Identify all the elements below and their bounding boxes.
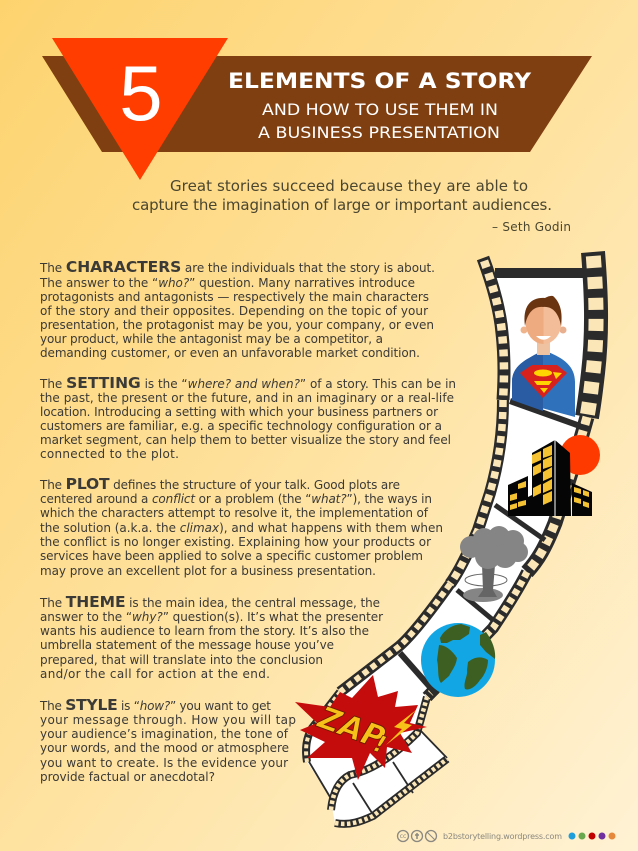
text block: plot: The PLOT defines the structure of your talk. Good plots are (39, 475, 400, 493)
subtitle line 2: A BUSINESS PRESENTATION (258, 123, 500, 142)
text block: characters: of the story and their opposites. Depending on the topic of your (40, 304, 428, 318)
text block: plot: may prove an excellent plot for a business presentation. (40, 564, 376, 578)
film frames: white interior (306, 272, 596, 797)
text block: setting: customers are familiar, e.g. a specific technology configuration or a (40, 419, 442, 433)
text block: setting: market segment, can help them to better visualize the story and feel (40, 433, 451, 447)
text block: setting: connected to the plot. (40, 447, 179, 461)
icon: city buildings (508, 440, 592, 516)
banner: brown band (42, 56, 592, 152)
badge number: 5 (119, 49, 163, 137)
text block: setting: the past, the present or the future, and in an imaginary or a real-life (40, 391, 454, 405)
film sprocket strip: left upper (483, 258, 504, 400)
text block: theme: answer to the “why?” question(s). It’s what the presenter (40, 610, 383, 624)
text block: theme: wants his audience to learn from the story. It’s also the (40, 624, 369, 638)
text block: style: provide factual or anecdotal? (40, 770, 215, 784)
icon: superhero character (512, 296, 575, 417)
icon: zap comic burst: ZAP (312, 699, 390, 757)
text block: style (39, 696, 296, 784)
text block: characters: demanding customer, or even an unfavorable market condition. (40, 346, 420, 360)
text block: plot: which the characters attempt to resolve it, the implementation of (40, 506, 429, 520)
film sprocket strip: lower edge (340, 584, 450, 692)
text block: plot: the conflict is no longer existing. Explaining how your products or (40, 535, 431, 549)
header banner (42, 38, 592, 180)
text block: plot: the solution (a.k.a. the climax), and what happens with them when (40, 521, 443, 535)
title: ELEMENTS OF A STORY (228, 69, 531, 94)
text block: characters (39, 258, 435, 360)
text block: characters: protagonists and antagonists — respectively the main characters (40, 290, 429, 304)
icon: zap comic burst (295, 675, 427, 780)
film curl at the bottom (308, 697, 447, 824)
text block: setting: location. Introducing a setting with which your business partners or (40, 405, 438, 419)
text block: style: your words, and the mood or atmosphere (40, 741, 289, 755)
text block: characters: The answer to the “who?” question. Many narratives introduce (39, 276, 415, 290)
badge: red triangle (52, 38, 228, 180)
text block: plot: centered around a conflict or a problem (the “what?”), the ways in (40, 492, 432, 506)
text block: theme (39, 593, 383, 681)
subtitle line 1: AND HOW TO USE THEM IN (262, 100, 498, 119)
text block: characters: The CHARACTERS are the individuals that the story is about. (39, 258, 435, 276)
text block: plot (39, 475, 443, 578)
film strip (306, 252, 596, 824)
text block: theme: and/or the call for action at the end. (40, 667, 270, 681)
text block: theme: umbrella statement of the message house you’ve (40, 638, 334, 652)
text block: theme: prepared, that will translate into the conclusion (40, 653, 323, 667)
quote: – Seth Godin (492, 220, 571, 234)
text block: plot: services have been applied to solve a specific customer problem (40, 549, 423, 563)
text block: characters: your product, while the antagonist may be a competitor, a (40, 332, 383, 346)
icon: zap comic burst: ! (370, 729, 390, 759)
footer: license icons and site: cc (400, 833, 406, 840)
icon: red sun (560, 435, 600, 475)
film crossbars (400, 273, 584, 695)
footer: license icons and site (398, 830, 616, 842)
footer: license icons and site: b2bstorytelling.wordpress.com (443, 832, 562, 841)
icon: earth globe (421, 623, 495, 697)
icon: mushroom cloud (460, 526, 528, 602)
quote: Great stories succeed because they are able to (170, 177, 528, 195)
text block: characters: presentation, the protagonist may be you, your company, or even (40, 318, 434, 332)
text block: theme: The THEME is the main idea, the central message, the (39, 593, 380, 611)
quote (132, 177, 571, 234)
text block: style: you want to create. Is the evidence your (40, 756, 288, 770)
text block: style: The STYLE is “how?” you want to get (39, 696, 271, 714)
text block: style: your message through. How you will tap (40, 713, 296, 727)
text block: setting (39, 374, 456, 461)
text block: style: your audience’s imagination, the tone of (40, 727, 289, 741)
text block: setting: The SETTING is the “where? and when?” of a story. This can be in (39, 374, 456, 392)
film sprocket strip: right upper (587, 252, 596, 417)
quote: capture the imagination of large or important audiences. (132, 196, 552, 214)
